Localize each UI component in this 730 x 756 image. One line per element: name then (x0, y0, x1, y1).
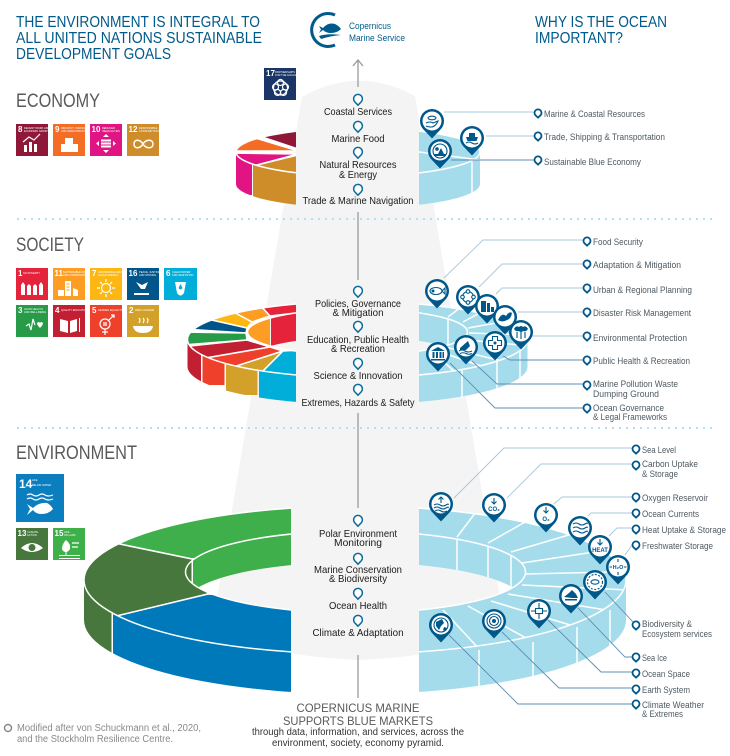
label: Ocean Space: Ocean Space (642, 669, 690, 680)
SDG tile 6: 6 (166, 269, 171, 278)
label: Oxygen Reservoir (554, 493, 708, 504)
SDG tile 9: AND INFRASTRUCTURE (61, 129, 91, 133)
title: environment and SDGs (16, 14, 262, 63)
footer: Copernicus Marine supports blue markets: environment, society, economy pyramid. (272, 738, 444, 749)
title: environment and SDGs: DEVELOPMENT GOALS (16, 46, 171, 63)
icon: carbon uptake: CO₂ (488, 507, 500, 513)
title: environment and SDGs: ALL UNITED NATIONS SUSTAINABLE (16, 30, 262, 47)
centre labels: economy: & Energy (339, 169, 378, 181)
source note: Modified after von Schuckmann et al., 2020, (17, 723, 201, 734)
centre labels: economy: Trade & Marine Navigation (302, 195, 414, 207)
logo: Copernicus Marine Service (312, 14, 405, 47)
icon: marine pollution (454, 335, 478, 364)
icon: biodiversity (583, 570, 607, 600)
SDG tile 11: SUSTAINABLE CITIES (63, 270, 90, 274)
icon: freshwater storage: H₂O (613, 565, 624, 571)
centre labels: society: Policies, Governance (315, 298, 401, 310)
SDG tile 17: 17 (266, 69, 275, 78)
environment ocean pins (429, 492, 630, 642)
heading: economy: ECONOMY (16, 91, 100, 112)
title: environment and SDGs: THE ENVIRONMENT IS INTEGRAL TO (16, 14, 260, 31)
label: Biodiversity & Ecosystem services: Biodiversity & (642, 619, 693, 630)
label: Environmental Protection (532, 332, 687, 344)
SDG tile 12: CONSUMPTION (139, 129, 159, 133)
centre labels: environment: Polar Environment (319, 528, 397, 540)
society ocean labels (444, 237, 692, 423)
label: Ocean Currents: Ocean Currents (642, 509, 699, 520)
SDG tile 11 (53, 268, 90, 300)
SDG tile 13: ACTION (27, 533, 37, 537)
centre labels: society (302, 286, 415, 409)
environment ocean labels (449, 445, 726, 720)
SDG tile 4: QUALITY EDUCATION (61, 308, 88, 312)
icon: sea ice (559, 584, 583, 614)
icon: sea level (429, 492, 453, 522)
SDG tile 6 (164, 268, 197, 300)
SDG tile 3 (16, 305, 48, 337)
economy ocean pins (420, 109, 484, 168)
SDG tile 15: ON LAND (64, 533, 76, 537)
SDG tile 16: PEACE, JUSTICE (139, 270, 160, 274)
SDG tile 7 (90, 268, 122, 300)
SDG tile 5: GENDER EQUALITY (98, 308, 123, 312)
source note (4, 723, 201, 745)
SDG tile 12: RESPONSIBLE (139, 126, 158, 130)
centre labels: environment: & Biodiversity (329, 573, 388, 585)
label: Heat Uptake & Storage (609, 525, 726, 536)
SDG tile 17 (264, 68, 296, 100)
centre labels: society: Extremes, Hazards & Safety (302, 397, 415, 409)
label: Ocean Governance & Legal Frameworks: & Legal Frameworks (593, 412, 667, 423)
label: Public Health & Recreation: Public Health & Recreation (593, 356, 690, 367)
source note: and the Stockholm Resilience Centre. (17, 734, 173, 745)
icon: heat uptake (588, 535, 612, 564)
icon: oxygen reservoir (534, 503, 558, 532)
label: Earth System: Earth System (642, 685, 690, 696)
centre labels: economy (302, 94, 414, 207)
label: Public Health & Recreation (503, 356, 690, 367)
SDG tile 2: ZERO HUNGER (135, 308, 154, 312)
SDG tile 7: AFFORDABLE AND (98, 270, 121, 274)
label: Ocean Governance & Legal Frameworks: Ocean Governance (593, 403, 664, 414)
footer: Copernicus Marine supports blue markets: COPERNICUS MARINE (296, 701, 420, 715)
icon: ocean space (527, 599, 551, 628)
SDG tile 11: 11 (54, 269, 64, 278)
SDG tile 1 (16, 268, 48, 300)
economy disc left: SDG coloured slices (236, 132, 296, 205)
SDG tile 17: PARTNERSHIPS (275, 70, 295, 74)
SDG tile 13: 13 (18, 529, 27, 538)
environment SDG tiles (16, 474, 85, 560)
SDG tile 7: 7 (92, 269, 97, 278)
label: Urban & Regional Planning: Urban & Regional Planning (593, 285, 692, 296)
icon: blue economy (428, 139, 452, 168)
label: Disaster Risk Management (518, 308, 691, 319)
label: Carbon Uptake & Storage: & Storage (642, 469, 678, 480)
footer: Copernicus Marine supports blue markets: through data, information, and services, across the (252, 727, 464, 738)
economy ocean labels (444, 109, 665, 168)
centre labels: environment: Climate & Adaptation (312, 627, 404, 639)
SDG tile 14 (16, 474, 64, 522)
pyramid tier: economy disc (236, 130, 480, 205)
centre labels: society: & Recreation (331, 343, 385, 355)
label: Biodiversity & Ecosystem services: Ecosystem services (642, 629, 712, 640)
SDG tile 12 (127, 124, 159, 156)
heading: society: SOCIETY (16, 235, 84, 256)
SDG tile 4 (53, 305, 88, 337)
SDG tile 7: CLEAN ENERGY (98, 273, 119, 277)
SDG tile 15: LIFE (64, 530, 70, 534)
label: Disaster Risk Management: Disaster Risk Management (593, 308, 691, 319)
SDG tile 10: INEQUALITIES (102, 129, 120, 133)
icon: oxygen reservoir: O₂ (542, 517, 550, 523)
icon: environmental protection (509, 320, 533, 350)
centre labels: environment: Marine Conservation (314, 564, 402, 576)
SDG tile 5: 5 (92, 306, 97, 315)
SDG tile 9 (53, 124, 91, 156)
label: Climate Weather & Extremes: & Extremes (642, 709, 683, 720)
icon: marine resources hand (420, 109, 444, 138)
SDG tile 1: NO POVERTY (23, 271, 40, 275)
icon: shipping (460, 126, 484, 156)
pyramid tier: society disc (188, 304, 528, 402)
label: Food Security (444, 237, 643, 278)
society disc right: ocean half (419, 304, 528, 402)
label: Sea Level: Sea Level (642, 445, 676, 456)
SDG tile 8: DECENT WORK AND (24, 126, 50, 130)
label: Marine Pollution Waste Dumping Ground: Dumping Ground (593, 389, 659, 400)
label: Marine & Coastal Resources (444, 109, 645, 120)
label: Sea Ice (578, 608, 667, 664)
central pyramid column (215, 81, 502, 660)
label: Ocean Governance & Legal Frameworks (450, 363, 667, 423)
SDG tile 3: AND WELL-BEING (24, 310, 46, 314)
SDG tile 14: BELOW WATER (32, 483, 51, 487)
SDG tile 16: 16 (128, 269, 138, 278)
SDG tile 3: 3 (18, 306, 23, 315)
centre labels: society: Education, Public Health (307, 334, 409, 346)
centre labels: environment: Monitoring (334, 537, 382, 549)
heading: environment: ENVIRONMENT (16, 443, 137, 464)
label: Sea Ice: Sea Ice (642, 653, 667, 664)
footer: Copernicus Marine supports blue markets: SUPPORTS BLUE MARKETS (283, 714, 433, 728)
environment disc right: ocean half (419, 508, 626, 692)
SDG tile 3: GOOD HEALTH (24, 307, 43, 311)
SDG tile 10: REDUCED (102, 126, 115, 130)
footer: Copernicus Marine supports blue markets (252, 701, 464, 749)
label: Climate Weather & Extremes: Climate Weather (642, 700, 704, 711)
SDG tile 16: AND STRONG (139, 273, 156, 277)
label: Ocean Space (548, 620, 690, 680)
icon: urban buildings (475, 294, 499, 324)
SDG tile 15: 15 (54, 529, 64, 538)
SDG tile 15 (53, 528, 85, 560)
SDG tile 1: 1 (18, 269, 23, 278)
SDG tile 5 (90, 305, 123, 337)
logo: Copernicus Marine Service: Marine Service (349, 33, 405, 43)
section dividers (17, 219, 714, 428)
SDG tile 4: 4 (55, 306, 60, 315)
icon: fish food security (425, 279, 449, 308)
SDG tile 13 (16, 528, 48, 560)
SDG tile 10: 10 (92, 125, 101, 134)
SDG tile 14: LIFE (32, 478, 38, 482)
label: Biodiversity & Ecosystem services (605, 592, 712, 640)
SDG tile 10 (90, 124, 122, 156)
label: Freshwater Storage: Freshwater Storage (642, 541, 713, 552)
SDG tile 8: ECONOMIC GROWTH (24, 129, 51, 133)
SDG tile 9: INDUSTRY, INNOVATION (61, 126, 91, 130)
centre labels: economy: Natural Resources (320, 159, 396, 171)
label: Ocean Currents (588, 509, 699, 520)
icon: adaptation ring (456, 285, 480, 314)
society SDG tiles (16, 268, 197, 337)
label: Marine Pollution Waste Dumping Ground (472, 361, 678, 400)
icon: disaster risk (493, 305, 517, 334)
label: Environmental Protection: Environmental Protection (593, 333, 687, 344)
label: Sea Level (454, 445, 676, 498)
centre labels: economy: Marine Food (332, 133, 385, 145)
logo: Copernicus Marine Service: Copernicus (349, 21, 391, 31)
icon: ocean governance (426, 342, 450, 372)
pyramid tier: environment disc (84, 508, 626, 692)
environment disc left: SDG coloured slices (84, 508, 291, 692)
SDG tile 6: CLEAN WATER (172, 270, 191, 274)
society disc left: SDG coloured slices (188, 304, 296, 402)
arrow: pyramid axis to Copernicus (353, 60, 363, 87)
SDG tile 13: CLIMATE (27, 530, 38, 534)
SDG tile 8 (16, 124, 51, 156)
economy SDG tiles (16, 124, 159, 156)
icon: carbon uptake (482, 493, 506, 522)
SDG tile 2: 2 (129, 306, 134, 315)
label: Carbon Uptake & Storage (507, 459, 698, 498)
centre labels: environment: Ocean Health (329, 600, 387, 612)
SDG tile 14: 14 (19, 477, 33, 491)
society ocean pins (425, 279, 533, 372)
SDG tile 9: 9 (55, 125, 60, 134)
label: Oxygen Reservoir: Oxygen Reservoir (642, 493, 708, 504)
label: Trade, Shipping & Transportation (486, 132, 665, 143)
SDG tile 8: 8 (18, 125, 23, 134)
icon: climate weather (429, 613, 453, 642)
label: Marine & Coastal Resources: Marine & Coastal Resources (544, 109, 645, 120)
label: Food Security: Food Security (593, 237, 643, 248)
icon: public health cross (483, 331, 507, 360)
label: Marine Pollution Waste Dumping Ground: Marine Pollution Waste (593, 379, 678, 390)
economy disc right: ocean half (419, 130, 480, 205)
icon: heat uptake: HEAT (592, 548, 608, 554)
title: why is the ocean important: WHY IS THE OCEAN (535, 14, 667, 31)
label: Freshwater Storage (625, 541, 713, 555)
centre labels: society: Science & Innovation (314, 370, 403, 382)
centre labels: economy: Coastal Services (324, 106, 392, 118)
label: Carbon Uptake & Storage: Carbon Uptake (642, 459, 698, 470)
SDG tile 6: AND SANITATION (172, 273, 194, 277)
title: why is the ocean important (535, 14, 667, 47)
label: Climate Weather & Extremes (449, 635, 704, 720)
SDG tile 2 (127, 305, 159, 337)
SDG tile 17: FOR THE GOALS (275, 73, 296, 77)
centre labels: society: & Mitigation (332, 307, 384, 319)
label: Adaptation & Mitigation: Adaptation & Mitigation (593, 260, 681, 271)
label: Earth System (502, 632, 690, 696)
label: Urban & Regional Planning (496, 284, 692, 296)
icon: ocean currents (568, 516, 592, 546)
label: Sustainable Blue Economy: Sustainable Blue Economy (544, 157, 641, 168)
icon: earth system (482, 609, 506, 638)
title: why is the ocean important: IMPORTANT? (535, 30, 623, 47)
icon: freshwater storage (606, 555, 630, 584)
centre labels: environment (312, 515, 404, 639)
SDG tile 12: 12 (128, 125, 138, 134)
label: Trade, Shipping & Transportation: Trade, Shipping & Transportation (544, 132, 665, 143)
SDG tile 11: AND COMMUNITIES (63, 273, 88, 277)
SDG tile 16 (127, 268, 160, 300)
label: Adaptation & Mitigation (479, 260, 681, 287)
pyramid axis segments (357, 212, 359, 698)
label: Sustainable Blue Economy (451, 156, 641, 168)
